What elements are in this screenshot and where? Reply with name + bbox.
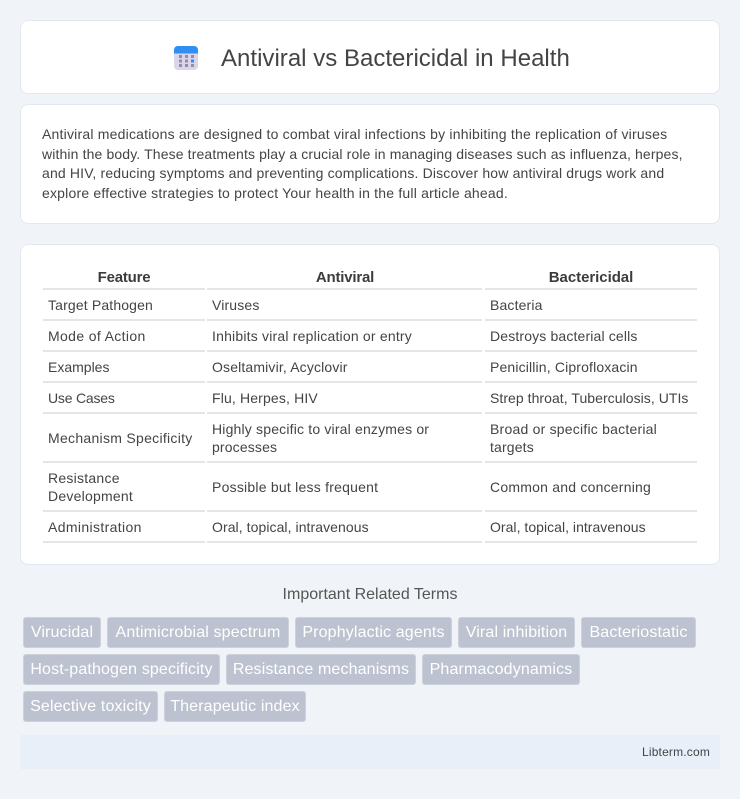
comparison table: Broad or specific bacterial — [490, 421, 657, 437]
comparison table: Penicillin, Ciprofloxacin — [490, 359, 638, 375]
related term tags: Resistance mechanisms — [233, 661, 409, 678]
comparison table: Antiviral — [316, 269, 374, 286]
comparison table: Oseltamivir, Acyclovir — [212, 359, 348, 375]
related term tags: Host-pathogen specificity — [30, 661, 213, 678]
comparison table: Possible but less frequent — [212, 479, 378, 495]
comparison table: Strep throat, Tuberculosis, UTIs — [490, 390, 688, 406]
comparison table: Viruses — [212, 297, 259, 313]
comparison table: Administration — [48, 519, 142, 535]
comparison table: Mode of Action — [48, 328, 146, 344]
related term tags: Bacteriostatic — [590, 624, 688, 641]
related term tags: Therapeutic index — [170, 698, 300, 715]
comparison table: Highly specific to viral enzymes or — [212, 421, 429, 437]
comparison table: Destroys bacterial cells — [490, 328, 638, 344]
related term tags: Virucidal — [31, 624, 93, 641]
comparison table: Examples — [48, 359, 109, 375]
intro text: Antiviral medications are designed to combat viral infections by inhibiting the replication of viruses — [42, 126, 667, 142]
related term tags: Pharmacodynamics — [430, 661, 572, 678]
header card — [20, 20, 720, 94]
comparison table: Target Pathogen — [48, 297, 153, 313]
comparison table: targets — [490, 439, 534, 455]
comparison table — [43, 269, 697, 543]
related term tags: Antimicrobial spectrum — [116, 624, 280, 641]
related term tags: Viral inhibition — [466, 624, 567, 641]
comparison table: Common and concerning — [490, 479, 651, 495]
table card — [20, 244, 720, 565]
intro text: and HIV, reducing symptoms and preventing complications. Discover how antiviral drugs work and — [42, 165, 664, 181]
related term tags — [23, 617, 696, 722]
intro card — [20, 104, 720, 224]
comparison table: Use Cases — [48, 390, 115, 406]
intro text: within the body. These treatments play a crucial role in managing diseases such as influenza, herpes, — [42, 146, 683, 162]
comparison table: Flu, Herpes, HIV — [212, 390, 318, 406]
comparison table: Feature — [98, 269, 150, 286]
related term tags: Prophylactic agents — [302, 624, 445, 641]
related terms heading: Important Related Terms — [283, 586, 457, 603]
comparison table: Bactericidal — [549, 269, 633, 286]
comparison table: Resistance — [48, 470, 120, 486]
comparison table: processes — [212, 439, 277, 455]
icon: calendar — [174, 46, 198, 70]
comparison table: Oral, topical, intravenous — [212, 519, 369, 535]
title: Antiviral vs Bactericidal in Health — [221, 45, 570, 72]
footer bar — [20, 735, 720, 769]
intro text: explore effective strategies to protect Your health in the full article ahead. — [42, 185, 508, 201]
comparison table: Oral, topical, intravenous — [490, 519, 646, 535]
intro text — [42, 126, 683, 201]
comparison table: Bacteria — [490, 297, 543, 313]
comparison table: Mechanism Specificity — [48, 430, 193, 446]
comparison table: Inhibits viral replication or entry — [212, 328, 412, 344]
footer brand: Libterm.com — [642, 745, 710, 759]
related term tags: Selective toxicity — [30, 698, 151, 715]
comparison table: Development — [48, 488, 133, 504]
